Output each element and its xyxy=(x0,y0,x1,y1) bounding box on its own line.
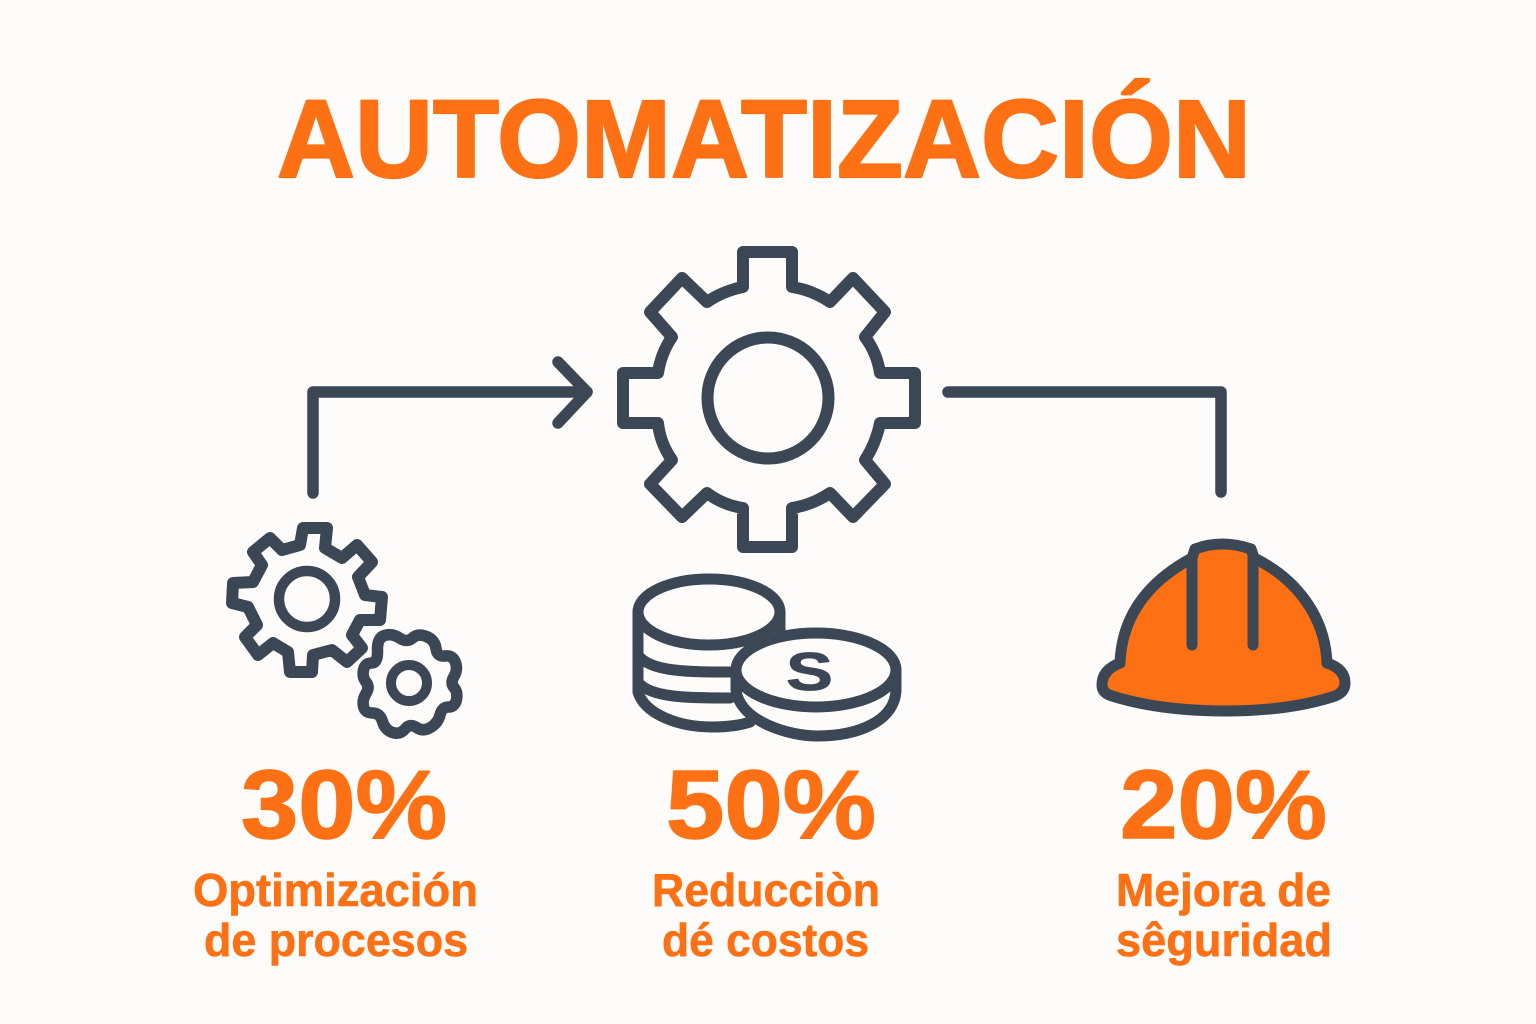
stat: 30% optimización de procesos: de procesos xyxy=(204,914,468,966)
stat: 20% mejora de seguridad: Mejora de xyxy=(1116,864,1331,916)
coin dollar mark: S xyxy=(786,642,833,702)
stat: 30% optimización de procesos: 30% xyxy=(241,750,447,859)
stat: 50% reducción de costos xyxy=(652,750,880,966)
stat: 30% optimización de procesos xyxy=(193,750,478,966)
title: AUTOMATIZACIÓN xyxy=(277,78,1251,201)
icon: orange hard hat xyxy=(1102,544,1345,711)
stat: 20% mejora de seguridad: 20% xyxy=(1120,750,1327,859)
stat: 50% reducción de costos: Reducciòn xyxy=(652,864,880,916)
connector line: central gear to helmet xyxy=(948,392,1221,492)
stat: 30% optimización de procesos: Optimización xyxy=(193,864,478,916)
icon: stack of coins xyxy=(638,579,896,736)
stat: 20% mejora de seguridad xyxy=(1116,750,1332,966)
stat: 20% mejora de seguridad: sêguridad xyxy=(1116,914,1332,966)
stat: 50% reducción de costos: 50% xyxy=(666,750,876,859)
icon: pair of gears xyxy=(232,528,457,733)
arrow: from processes to central gear xyxy=(313,362,587,493)
icon: central gear xyxy=(623,252,915,547)
stat: 50% reducción de costos: dé costos xyxy=(662,914,869,966)
